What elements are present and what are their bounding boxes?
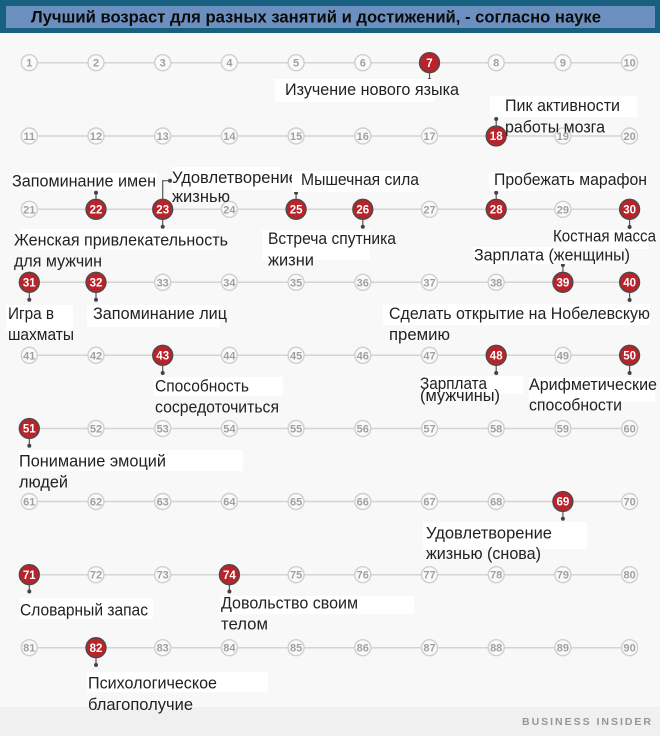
timeline row: ages 71-80: 77 [423,570,436,582]
timeline row: ages 81-90: 83 [157,643,169,655]
label: run a marathon: Пробежать марафон [494,171,647,189]
marker: age 25: 25 [290,204,303,216]
timeline row: ages 11-20 [21,117,638,146]
label: female attractiveness for men: Женская привлекательность [14,232,228,250]
label: vocabulary: Словарный запас [20,602,148,620]
timeline row: ages 51-60: 59 [557,424,569,436]
label: salary men: Зарплата [420,375,488,393]
marker: age 31 [19,272,39,302]
label: remembering faces: Запоминание лиц [93,305,228,323]
label: psychological wellbeing: благополучие [88,696,193,714]
timeline row: ages 81-90 [21,638,638,667]
marker: age 69: 69 [557,497,569,509]
brand: business insider: BUSINESS INSIDER [522,716,651,728]
timeline row: ages 61-70: 61 [23,496,35,508]
timeline row: ages 71-80: 78 [490,570,502,582]
marker: age 82 [86,638,106,667]
label: understanding emotions: Понимание эмоций [19,453,166,471]
timeline row: ages 1-10: 9 [560,58,566,70]
timeline row: ages 21-30: 27 [423,204,436,216]
marker: age 39 [553,263,573,292]
timeline row: ages 11-20: 20 [623,131,636,143]
marker: age 22: 22 [90,204,102,216]
label: salary men: (мужчины) [420,387,500,405]
label: learning a new language: Изучение нового языка [285,81,460,99]
marker: age 51 [19,418,39,448]
timeline row: ages 51-60: 52 [90,424,102,436]
marker: age 43: 43 [156,350,169,362]
timeline row: ages 81-90: 84 [223,643,236,655]
label: ability to concentrate [154,377,283,417]
label: arithmetic ability [529,376,657,415]
timeline row: ages 21-30: 21 [23,204,35,216]
label: body satisfaction: телом [221,615,268,633]
label: body satisfaction: Довольство своим [221,594,358,612]
timeline row: ages 31-40: 35 [290,277,302,289]
timeline row: ages 51-60: 56 [357,424,369,436]
timeline row: ages 81-90: 81 [23,643,35,655]
marker: age 74: 74 [223,570,236,582]
label: psychological wellbeing [87,672,268,714]
label: meeting a life partner: жизни [268,252,314,270]
timeline row: ages 61-70: 67 [423,496,436,508]
timeline row: ages 31-40 [19,263,640,302]
marker: age 32: 32 [90,277,102,289]
timeline row: ages 71-80 [19,565,638,594]
timeline row: ages 41-50: 46 [357,350,369,362]
timeline row: ages 31-40: 38 [490,277,502,289]
marker: age 22 [86,191,106,219]
marker: age 31: 31 [23,277,36,289]
marker: age 43 [153,345,173,375]
marker: age 26: 26 [356,204,369,216]
timeline row: ages 11-20: 19 [557,131,569,143]
timeline row: ages 51-60: 58 [490,424,502,436]
timeline row: ages 61-70: 66 [357,496,369,508]
marker: age 23 [153,179,173,229]
label: life satisfaction [172,167,298,206]
timeline row: ages 41-50: 47 [423,350,436,362]
timeline row: ages 61-70: 65 [290,496,302,508]
label: female attractiveness for men [14,229,228,271]
label: life satisfaction: жизнью [172,188,230,206]
timeline row: ages 31-40: 36 [357,277,369,289]
timeline row: ages 81-90: 88 [490,643,502,655]
timeline row: ages 1-10: 1 [26,58,32,70]
timeline row: ages 81-90: 87 [423,643,436,655]
timeline row: ages 51-60: 60 [623,424,636,436]
timeline row: ages 61-70 [21,492,638,521]
timeline row: ages 81-90: 89 [557,643,569,655]
label: nobel prize discovery [383,304,650,344]
marker: age 50 [620,345,640,375]
timeline row: ages 71-80: 72 [90,570,102,582]
timeline row: ages 81-90: 86 [357,643,369,655]
timeline row: ages 81-90: 85 [290,643,302,655]
timeline row: ages 61-70: 63 [157,496,169,508]
title: Лучший возраст для разных занятий и достижений, - согласно науке [31,8,601,26]
label: salary men [420,375,523,405]
timeline row: ages 71-80: 76 [357,570,369,582]
timeline row: ages 41-50: 41 [23,350,35,362]
timeline row: ages 71-80: 75 [290,570,302,582]
marker: age 18 [486,117,506,146]
marker: age 39: 39 [557,277,569,289]
timeline row: ages 1-10: 2 [93,58,99,70]
timeline row: ages 41-50: 49 [557,350,569,362]
marker: age 71 [19,565,39,594]
timeline row: ages 1-10: 6 [360,58,366,70]
label: life satisfaction again: жизнью (снова) [426,545,541,563]
timeline row: ages 1-10: 8 [493,58,499,70]
timeline row: ages 21-30: 29 [557,204,569,216]
label: meeting a life partner: Встреча спутника [268,230,397,248]
marker: age 28 [486,191,506,219]
label: muscle strength: Мышечная сила [301,171,420,189]
timeline row: ages 51-60: 57 [423,424,436,436]
marker: age 18: 18 [490,131,503,143]
label: playing chess: шахматы [8,326,74,344]
timeline row: ages 41-50: 42 [90,350,102,362]
timeline row: ages 1-10: 5 [293,58,299,70]
timeline row: ages 51-60: 53 [157,424,169,436]
label: playing chess [6,305,74,344]
timeline row: ages 11-20: 14 [223,131,236,143]
timeline row: ages 51-60: 55 [290,424,302,436]
timeline row: ages 11-20: 17 [423,131,436,143]
timeline row: ages 11-20: 16 [357,131,369,143]
marker: age 71: 71 [23,570,36,582]
label: arithmetic ability: способности [529,397,622,415]
label: peak brain activity [490,96,637,137]
label: psychological wellbeing: Психологическое [88,674,217,692]
marker: age 40: 40 [623,277,636,289]
label: arithmetic ability: Арифметические [529,376,657,394]
timeline row: ages 61-70: 64 [223,496,236,508]
timeline row: ages 1-10 [21,53,638,82]
timeline row: ages 31-40: 33 [157,277,169,289]
label: playing chess: Игра в [8,305,54,323]
timeline row: ages 1-10: 4 [226,58,233,70]
marker: age 69 [553,492,573,521]
timeline row: ages 41-50: 44 [223,350,236,362]
timeline row: ages 21-30: 24 [223,204,236,216]
label: life satisfaction again [423,522,587,563]
timeline row: ages 11-20: 12 [90,131,102,143]
label: understanding emotions: людей [19,474,68,492]
label: female attractiveness for men: для мужчин [14,253,102,271]
timeline row: ages 71-80: 80 [623,570,636,582]
label: remembering names: Запоминание имен [12,173,156,191]
timeline row: ages 31-40: 37 [423,277,436,289]
label: nobel prize discovery: Сделать открытие на Нобелевскую [389,305,650,323]
marker: age 74 [219,565,239,594]
timeline row: ages 71-80: 79 [557,570,569,582]
marker: age 23: 23 [156,204,169,216]
marker: age 48: 48 [490,350,503,362]
label: peak brain activity: работы мозга [505,119,606,137]
header banner [0,0,660,33]
timeline row: ages 41-50 [21,345,640,375]
label: meeting a life partner [262,230,397,270]
timeline row: ages 1-10: 3 [160,58,166,70]
timeline row: ages 1-10: 10 [623,58,636,70]
timeline row: ages 61-70: 70 [623,496,636,508]
timeline row: ages 41-50: 45 [290,350,302,362]
label: ability to concentrate: сосредоточиться [155,399,279,417]
timeline row: ages 71-80: 73 [157,570,169,582]
marker: age 82: 82 [90,643,102,655]
label: peak brain activity: Пик активности [505,97,620,115]
label: life satisfaction: Удовлетворение [172,169,298,187]
label: ability to concentrate: Способность [155,378,249,396]
timeline row: ages 51-60: 54 [223,424,236,436]
marker: age 28: 28 [490,204,503,216]
timeline row: ages 11-20: 11 [23,131,35,143]
label: life satisfaction again: Удовлетворение [426,524,552,542]
timeline row: ages 31-40: 34 [223,277,236,289]
marker: age 30: 30 [623,204,636,216]
timeline row: ages 81-90: 90 [623,643,636,655]
marker: age 25 [286,191,306,219]
label: body satisfaction [220,594,414,633]
timeline row: ages 11-20: 13 [157,131,169,143]
marker: age 32 [86,272,106,302]
timeline row: ages 61-70: 68 [490,496,502,508]
timeline row: ages 61-70: 62 [90,496,102,508]
marker: age 26 [353,199,373,229]
marker: age 51: 51 [23,424,36,436]
marker: age 30 [620,199,640,229]
timeline row: ages 51-60 [19,418,638,448]
label: understanding emotions [19,450,243,492]
label: nobel prize discovery: премию [389,326,450,344]
timeline row: ages 21-30 [21,179,640,229]
marker: age 40 [620,272,640,302]
marker: age 7: 7 [426,58,433,70]
marker: age 50: 50 [623,350,636,362]
timeline row: ages 11-20: 15 [290,131,302,143]
marker: age 7 [420,53,440,82]
marker: age 48 [486,345,506,375]
label: salary women: Зарплата (женщины) [474,247,630,265]
